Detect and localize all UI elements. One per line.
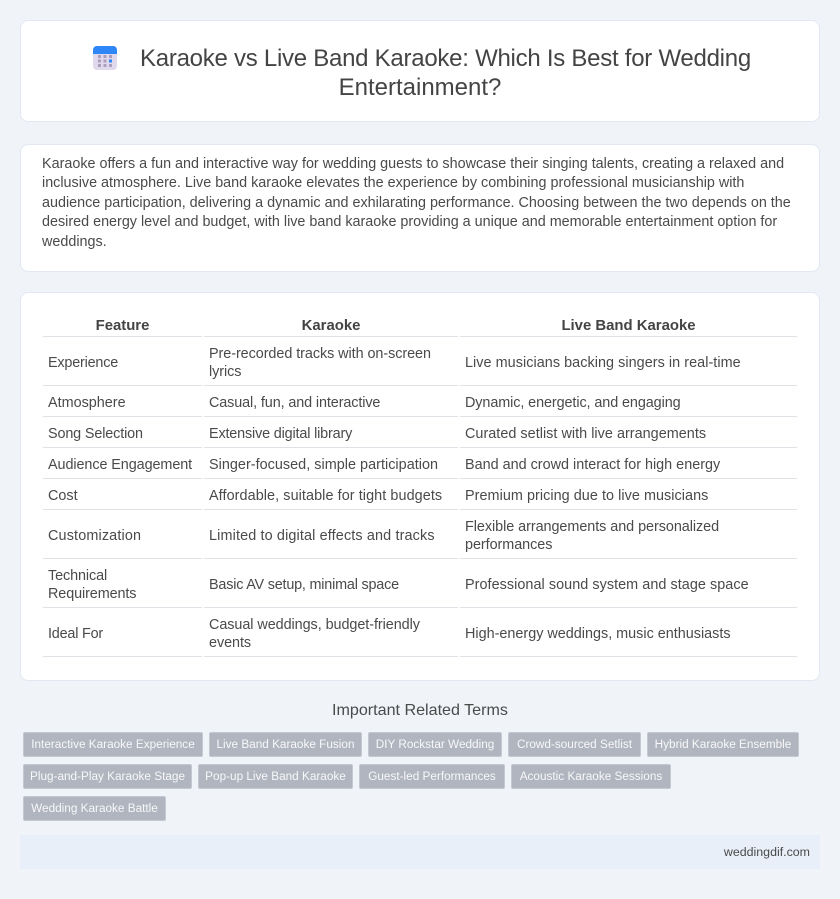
row: Atmosphere: Dynamic, energetic, and engaging: [465, 395, 681, 411]
title: Karaoke vs Live Band Karaoke: Which Is Best for Wedding: [140, 45, 751, 72]
tag: Interactive Karaoke Experience: [31, 738, 195, 751]
row: Cost: Cost: [48, 488, 78, 504]
row: Audience Engagement: Band and crowd interact for high energy: [465, 457, 720, 473]
text block: introduction: audience participation, delivering a dynamic and exhilarating performance. Choosing between the two depends on the: [42, 195, 791, 211]
row: Song Selection: Curated setlist with live arrangements: [465, 426, 706, 442]
tag: DIY Rockstar Wedding: [376, 738, 494, 751]
row: Song Selection: Song Selection: [48, 426, 143, 442]
row: Audience Engagement: [48, 457, 720, 473]
tag: Crowd-sourced Setlist: [517, 738, 632, 751]
row: Technical Requirements: Requirements: [48, 586, 136, 602]
table header: Karaoke: Karaoke: [302, 318, 360, 334]
row: Customization: performances: [465, 537, 552, 553]
title: Entertainment?: [339, 74, 501, 101]
text block: introduction: inclusive atmosphere. Live band karaoke elevates the experience by combining professional musicianship with: [42, 175, 744, 191]
tag: Acoustic Karaoke Sessions: [520, 770, 662, 783]
heading: related terms: Important Related Terms: [332, 701, 508, 719]
row: Technical Requirements: Technical: [48, 568, 107, 584]
row: Audience Engagement: Singer-focused, simple participation: [209, 457, 438, 473]
row: Ideal For: [48, 617, 731, 651]
panel: header: [20, 20, 820, 122]
text block: introduction: weddings.: [42, 234, 107, 250]
row: Customization: Customization: [48, 528, 141, 544]
tag: [209, 732, 362, 757]
row: Customization: Flexible arrangements and personalized: [465, 519, 719, 535]
table header: Live Band Karaoke: Live Band Karaoke: [561, 318, 696, 334]
tag: [511, 764, 671, 789]
panel: comparison table: [20, 292, 820, 681]
row: Atmosphere: [48, 395, 681, 411]
row: Ideal For: events: [209, 635, 251, 651]
row: Technical Requirements: Professional sound system and stage space: [465, 577, 749, 593]
row: Audience Engagement: Audience Engagement: [48, 457, 192, 473]
title: [140, 45, 751, 101]
row: Customization: Limited to digital effects and tracks: [209, 528, 435, 544]
tag: [508, 732, 641, 757]
tag list: related terms: [23, 732, 799, 821]
text block: introduction: desired energy level and budget, with live band karaoke providing a unique and memorable entertainment option for: [42, 214, 777, 230]
footer bar: [20, 835, 820, 869]
row: Customization: [48, 519, 719, 553]
row: Atmosphere: Atmosphere: [48, 395, 126, 411]
row: Ideal For: Casual weddings, budget-friendly: [209, 617, 420, 633]
tag: [23, 796, 166, 821]
tag: [359, 764, 505, 789]
tag: Live Band Karaoke Fusion: [216, 738, 354, 751]
row: Ideal For: Ideal For: [48, 626, 103, 642]
tag: Guest-led Performances: [368, 770, 496, 783]
tag: [23, 764, 192, 789]
row: Experience: lyrics: [209, 364, 241, 380]
row: Experience: Experience: [48, 355, 118, 371]
tag: Hybrid Karaoke Ensemble: [655, 738, 791, 751]
tag: [368, 732, 502, 757]
row: Atmosphere: Casual, fun, and interactive: [209, 395, 380, 411]
row: Ideal For: High-energy weddings, music enthusiasts: [465, 626, 731, 642]
footer source text: weddingdif.com: [724, 845, 810, 859]
tag: Wedding Karaoke Battle: [31, 802, 158, 815]
tag: [647, 732, 799, 757]
row: Experience: [48, 346, 741, 380]
row: Song Selection: [48, 426, 706, 442]
tag: Pop-up Live Band Karaoke: [205, 770, 346, 783]
icon: calendar: [93, 46, 117, 70]
table header: Feature: Feature: [96, 318, 149, 334]
row: Cost: Premium pricing due to live musicians: [465, 488, 708, 504]
row: Technical Requirements: Basic AV setup, minimal space: [209, 577, 399, 593]
text block: introduction: Karaoke offers a fun and interactive way for wedding guests to showcase their singing talents, creating a relaxed and: [42, 156, 784, 172]
panel: introduction: [20, 144, 820, 272]
tag: [198, 764, 353, 789]
row: Cost: [48, 488, 708, 504]
text block: introduction: [42, 156, 791, 250]
row: Experience: Pre-recorded tracks with on-screen: [209, 346, 431, 362]
tag: [23, 732, 203, 757]
row: Experience: Live musicians backing singers in real-time: [465, 355, 741, 371]
row: Technical Requirements: [48, 568, 749, 602]
tag: Plug-and-Play Karaoke Stage: [30, 770, 185, 783]
row: Cost: Affordable, suitable for tight budgets: [209, 488, 442, 504]
row: Song Selection: Extensive digital library: [209, 426, 352, 442]
